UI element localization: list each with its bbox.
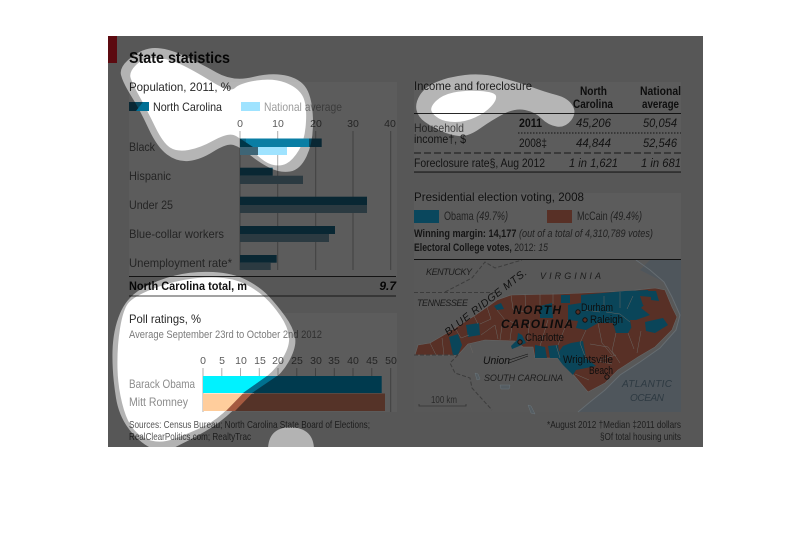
population row labels: Unemployment rate* <box>129 256 232 270</box>
population row labels <box>129 140 232 270</box>
label: Tennessee: TENNESSEE <box>417 298 469 308</box>
Black bar: North Carolina highlight <box>246 138 309 147</box>
city: Durham: Durham <box>581 302 613 314</box>
city: Charlotte: Charlotte <box>525 332 564 344</box>
poll chart axis: 0 <box>200 355 206 367</box>
population chart axis: 40 <box>384 118 396 130</box>
sources note <box>129 419 370 443</box>
total row: North Carolina population <box>129 276 397 296</box>
label: Union county with pointer: Union <box>483 355 510 367</box>
North Carolina counties in McCain colour <box>415 288 677 392</box>
legend: population chart: National average <box>264 100 342 114</box>
poll chart axis: 35 <box>328 355 340 367</box>
row: household income: income†, $ <box>414 132 466 146</box>
label: Virginia: VIRGINIA <box>540 271 601 281</box>
table heading: Income and foreclosure <box>414 79 532 93</box>
row: household income: Household <box>414 121 464 135</box>
chart heading: population: Population, 2011, % <box>129 80 231 94</box>
label: Atlantic Ocean: ATLANTIC <box>621 379 673 390</box>
county boundaries <box>430 292 641 380</box>
poll chart axis: 10 <box>235 355 247 367</box>
row: household income <box>414 116 681 150</box>
chart heading: poll ratings: Poll ratings, % <box>129 312 201 326</box>
row: household income: 52,546 <box>643 136 677 150</box>
poll chart axis: 25 <box>291 355 303 367</box>
state borders <box>414 260 522 410</box>
tinted panel backgrounds <box>129 82 681 412</box>
label: Atlantic Ocean <box>621 379 673 404</box>
electoral college votes: Electoral College votes, 2012: 15 <box>414 242 549 254</box>
population bar chart <box>240 138 367 270</box>
poll chart axis: 30 <box>310 355 322 367</box>
poll chart axis <box>200 355 397 412</box>
city: Wrightsville Beach: Wrightsville <box>563 354 613 366</box>
map land background <box>414 260 681 412</box>
footnotes: §Of total housing units <box>600 431 681 443</box>
left column: title and population chart <box>129 50 397 443</box>
footnotes <box>547 419 681 443</box>
poll chart axis: 5 <box>219 355 225 367</box>
population row labels: Under 25 <box>129 198 173 212</box>
row: household income: 2008‡ <box>519 136 547 150</box>
column headers <box>573 84 681 111</box>
legend swatch highlight <box>136 102 149 111</box>
counties in Obama colour <box>449 290 668 375</box>
election legend: McCain (49.4%) <box>577 209 642 223</box>
row: household income: 50,054 <box>643 116 677 130</box>
poll bar chart <box>203 376 385 411</box>
label: North Carolina: NORTH <box>513 303 561 317</box>
map of North Carolina <box>414 260 681 414</box>
election panel <box>414 190 653 254</box>
poll row labels <box>129 377 195 409</box>
poll subtitle: Average September 23rd to October 2nd 2012 <box>129 329 322 341</box>
population row labels: Blue-collar workers <box>129 227 224 241</box>
label: Blue Ridge Mts: BLUE RIDGE MTS. <box>442 267 529 338</box>
Black bar: national light segment <box>258 147 287 155</box>
population chart axis: 10 <box>272 118 284 130</box>
poll chart axis: 15 <box>254 355 266 367</box>
scale bar: 100 km <box>431 394 457 406</box>
title: State statistics <box>129 50 230 67</box>
sources note: RealClearPolitics.com; RealtyTrac <box>129 431 251 443</box>
population chart axis <box>237 118 396 270</box>
total row: North Carolina population: 9.7 <box>379 279 397 293</box>
city: Wrightsville Beach: Beach <box>589 365 613 377</box>
map top rule <box>414 258 681 260</box>
row: foreclosure rate: 1 in 681 <box>641 156 681 170</box>
label: Union county with pointer <box>483 354 528 367</box>
income and foreclosure table <box>414 79 681 172</box>
row: household income: 45,206 <box>576 116 611 130</box>
row: foreclosure rate: Foreclosure rate§, Aug 2012 <box>414 156 545 170</box>
label: South Carolina: SOUTH CAROLINA <box>484 373 563 383</box>
footnotes: *August 2012 †Median ‡2011 dollars <box>547 419 681 431</box>
label: North Carolina <box>501 303 573 331</box>
winning margin: Winning margin: 14,177 (out of a total of 4,310,789 votes) <box>414 228 653 240</box>
row: foreclosure rate: 1 in 1,621 <box>569 156 618 170</box>
row: household income: 2011 <box>519 116 542 130</box>
sound and coast <box>578 260 680 412</box>
election legend: Obama (49.7%) <box>444 209 508 223</box>
city: Raleigh: Raleigh <box>590 314 623 326</box>
legend: population chart <box>129 100 342 114</box>
poll chart axis: 45 <box>366 355 378 367</box>
column headers: National <box>640 84 681 98</box>
Black bar: dark start <box>240 138 253 147</box>
sources note: Sources: Census Bureau; North Carolina State Board of Elections; <box>129 419 370 431</box>
ocean <box>578 260 681 412</box>
label: Kentucky: KENTUCKY <box>426 267 473 277</box>
poll chart axis: 50 <box>385 355 397 367</box>
legend: population chart: North Carolina <box>153 100 222 114</box>
bright highlighted bars in the attention zones <box>136 102 309 155</box>
column headers: Carolina <box>573 97 613 111</box>
legend swatch: national average <box>241 102 260 111</box>
city: Wrightsville Beach <box>563 354 613 379</box>
population row labels: Black <box>129 140 156 154</box>
poll row labels: Mitt Romney <box>129 395 188 409</box>
label: Atlantic Ocean: OCEAN <box>630 393 665 404</box>
counties in McCain colour inset <box>630 296 668 331</box>
lakes <box>475 373 535 414</box>
row: household income: 44,844 <box>576 136 611 150</box>
label: North Carolina: CAROLINA <box>501 317 573 331</box>
section marker tab <box>108 36 117 63</box>
election heading: Presidential election voting, 2008 <box>414 190 584 204</box>
population chart axis: 30 <box>347 118 359 130</box>
column headers: average <box>642 97 679 111</box>
Romney bar <box>203 394 385 411</box>
Black bar: national average highlight <box>240 147 258 155</box>
heat overlay <box>108 36 703 447</box>
population chart axis: 0 <box>237 118 243 130</box>
poll row labels: Barack Obama <box>129 377 195 391</box>
Obama bar <box>203 376 382 393</box>
poll chart axis: 40 <box>347 355 359 367</box>
election legend <box>414 209 642 223</box>
column headers: North <box>580 84 607 98</box>
total row: North Carolina population: North Carolina total, m <box>129 279 247 293</box>
population chart axis: 20 <box>310 118 322 130</box>
poll chart axis: 20 <box>272 355 284 367</box>
row: foreclosure rate <box>414 156 681 170</box>
population row labels: Hispanic <box>129 169 171 183</box>
